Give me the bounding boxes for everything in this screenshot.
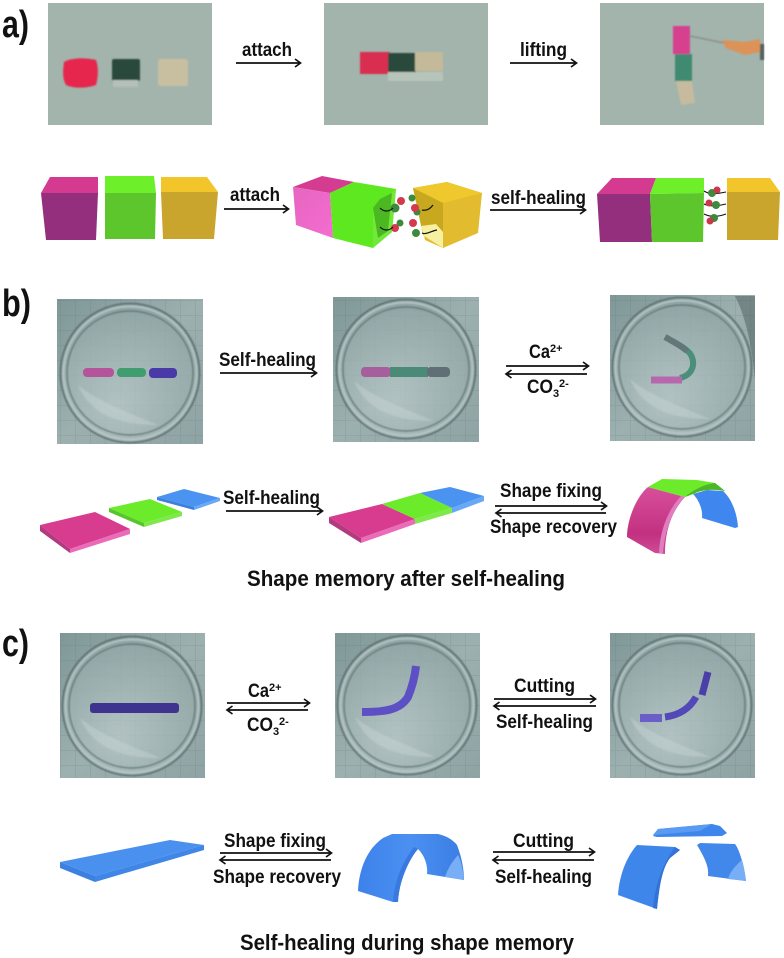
arrows: Ca2+ and CO3 2- reversible c bbox=[227, 681, 310, 738]
schematic: three separate slabs bbox=[40, 489, 220, 553]
arrows: shape fixing and shape recovery c: Shape recovery bbox=[213, 867, 341, 888]
schematic: healed cubes bbox=[597, 178, 780, 242]
arrow: self-healing schematic: self-healing bbox=[491, 188, 586, 209]
arrows: Ca2+ and CO3 2- reversible: 2- bbox=[559, 378, 569, 390]
arrows: Ca2+ and CO3 2- reversible c: 2+ bbox=[269, 682, 282, 694]
schematic: cubes with host-guest bonds bbox=[293, 176, 482, 248]
arrow: attach schematic bbox=[224, 185, 288, 213]
arrow: lifting: lifting bbox=[520, 40, 567, 61]
arrow: lifting bbox=[510, 40, 576, 67]
label b: b) bbox=[2, 283, 31, 325]
panel c bbox=[2, 623, 755, 955]
schematic: three separate cubes bbox=[41, 176, 218, 240]
photo: bent purple strip bbox=[335, 633, 480, 778]
photo: three gel strips in dish bbox=[57, 299, 203, 444]
panel b bbox=[2, 283, 755, 591]
arrows: cutting and self-healing schematic: Cutting bbox=[513, 831, 574, 852]
schematic: healed slab bbox=[329, 487, 484, 543]
arrows: Ca2+ and CO3 2- reversible: CO bbox=[527, 377, 553, 398]
panel a bbox=[2, 3, 780, 248]
arrows: cutting and self-healing photo: Self-healing bbox=[496, 712, 593, 733]
title: self-healing during shape memory: Self-healing during shape memory bbox=[240, 930, 575, 955]
schematic: cut blue arch pieces bbox=[618, 824, 746, 909]
arrows: shape fixing and shape recovery c: Shape fixing bbox=[224, 831, 326, 852]
arrows: cutting and self-healing schematic: Self-healing bbox=[495, 867, 592, 888]
label c: c) bbox=[2, 623, 29, 665]
photo: bent strip in dish bbox=[610, 295, 755, 441]
arrows: Ca2+ and CO3 2- reversible: 3 bbox=[553, 388, 559, 400]
arrows: Ca2+ and CO3 2- reversible c: Ca bbox=[248, 681, 269, 702]
arrows: shape fixing and shape recovery: Shape fixing bbox=[500, 481, 602, 502]
arrows: cutting and self-healing photo bbox=[494, 676, 596, 733]
arrows: shape fixing and shape recovery bbox=[490, 481, 617, 538]
arrows: Ca2+ and CO3 2- reversible: Ca bbox=[529, 342, 550, 363]
arrows: Ca2+ and CO3 2- reversible: 2+ bbox=[550, 343, 563, 355]
arrows: shape fixing and shape recovery: Shape recovery bbox=[490, 517, 617, 538]
arrows: Ca2+ and CO3 2- reversible c: 2- bbox=[279, 716, 289, 728]
arrows: cutting and self-healing photo: Cutting bbox=[514, 676, 575, 697]
photo: attached gel cubes bbox=[324, 3, 488, 125]
photo: three separate gel cubes bbox=[48, 3, 212, 125]
arrows: cutting and self-healing schematic bbox=[493, 831, 594, 888]
arrows: Ca2+ and CO3 2- reversible c: CO bbox=[247, 715, 273, 736]
arrow: attach schematic: attach bbox=[230, 185, 280, 206]
arrow: attach: attach bbox=[242, 40, 292, 61]
schematic: bent arch bbox=[627, 479, 738, 554]
arrows: shape fixing and shape recovery c bbox=[213, 831, 341, 888]
photo: lifted gel column with needle bbox=[600, 3, 764, 125]
arrows: Ca2+ and CO3 2- reversible bbox=[506, 342, 588, 400]
arrow: self-healing schematic b: Self-healing bbox=[223, 488, 320, 509]
arrow: self-healing photo: Self-healing bbox=[219, 350, 316, 371]
photo: cut purple strip bbox=[610, 633, 755, 778]
schematic: flat blue slab bbox=[60, 840, 204, 882]
arrows: Ca2+ and CO3 2- reversible c: 3 bbox=[273, 726, 279, 738]
schematic: blue arch bbox=[358, 834, 464, 902]
title: shape memory after self-healing: Shape memory after self-healing bbox=[247, 566, 565, 591]
label a: a) bbox=[2, 4, 29, 46]
arrow: attach bbox=[236, 40, 300, 67]
photo: straight purple strip bbox=[60, 633, 205, 778]
photo: healed gel strip in dish bbox=[333, 297, 479, 442]
